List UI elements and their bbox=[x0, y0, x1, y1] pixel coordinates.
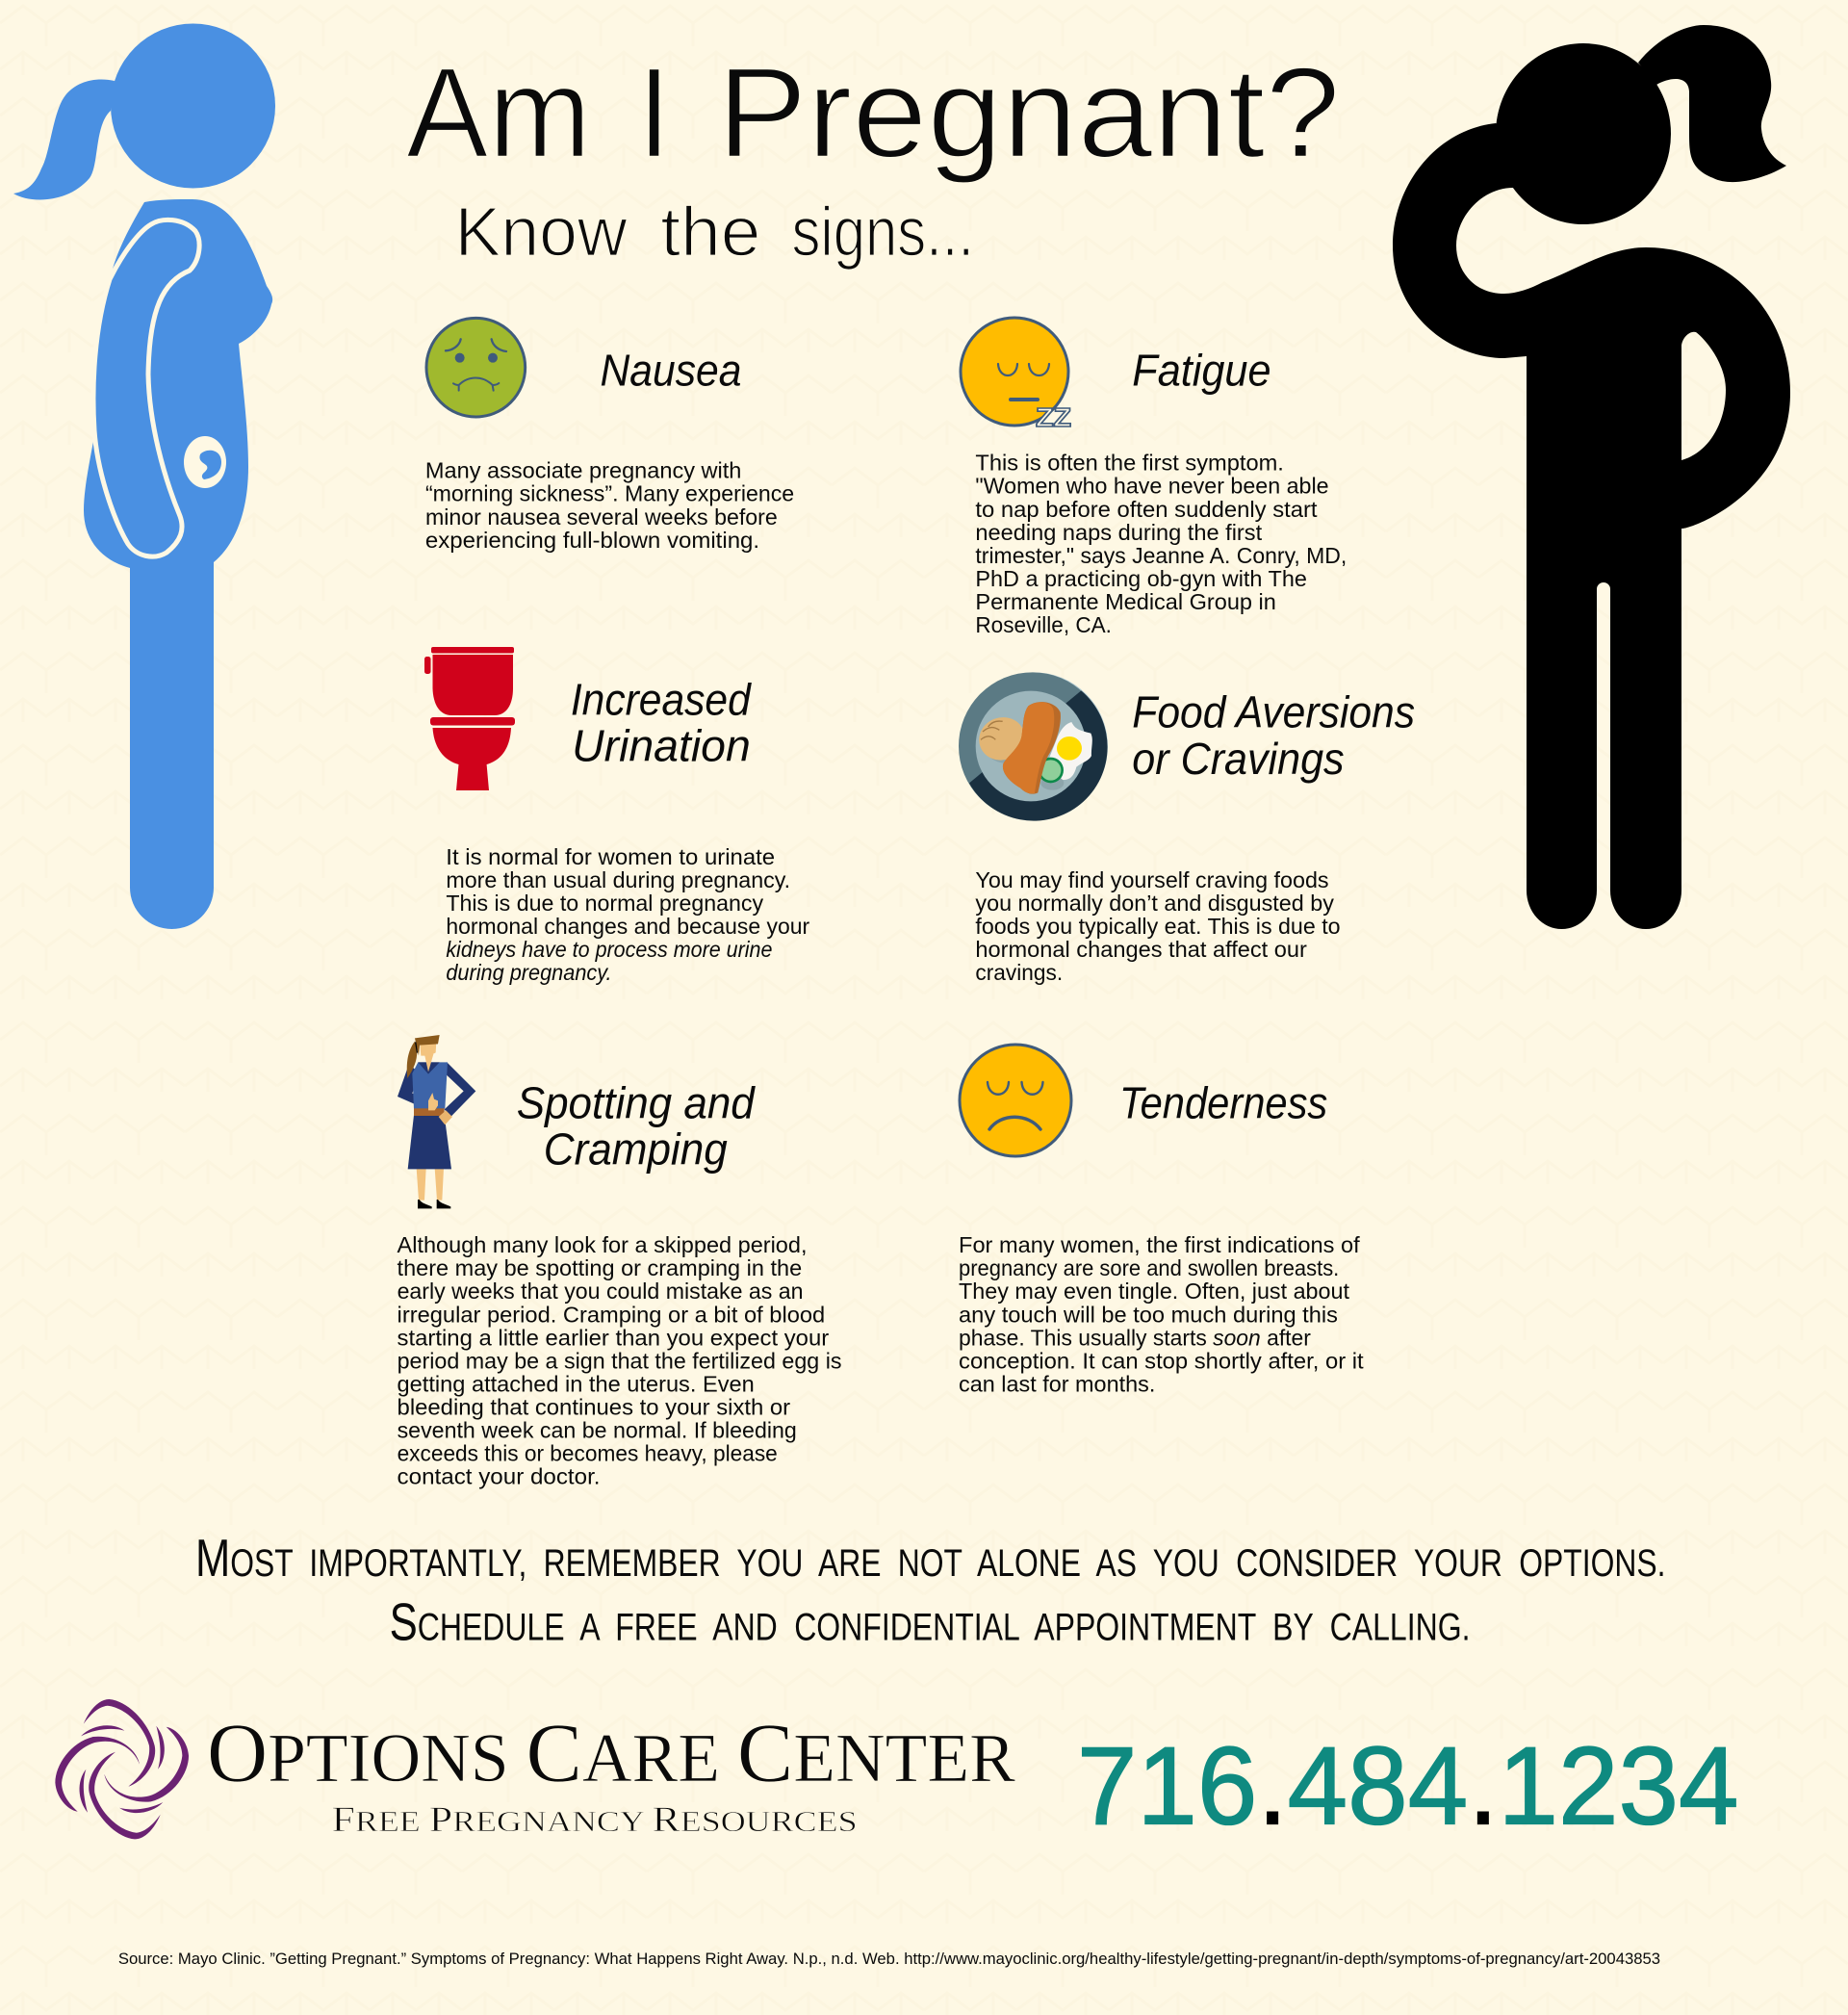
text: urination description: This is due to normal pregnancy bbox=[446, 891, 763, 916]
source citation: Source: Mayo Clinic. ”Getting Pregnant.” Symptoms of Pregnancy: What Happens Right Away. N.p., n.d. Web. http://www.mayoclinic.org/healthy-lifestyle/getting-pregnant/in-depth/symptoms-of-pregnancy/art-20043853 bbox=[118, 1950, 1660, 1968]
heading: spotting and cramping: Cramping bbox=[544, 1124, 728, 1175]
icon: toilet bbox=[424, 647, 515, 790]
panel: nausea bbox=[425, 318, 794, 553]
text: fatigue description: PhD a practicing ob-gyn with The bbox=[975, 566, 1307, 591]
text: spotting description: early weeks that you could mistake as an bbox=[398, 1279, 804, 1304]
title bbox=[406, 41, 1341, 185]
text: spotting description: getting attached in the uterus. Even bbox=[398, 1371, 755, 1396]
icon: standing woman bbox=[398, 1035, 475, 1208]
text: fatigue description: needing naps during the first bbox=[975, 520, 1263, 545]
text: fatigue description: This is often the first symptom. bbox=[975, 451, 1284, 476]
text: nausea description: “morning sickness”. Many experience bbox=[425, 481, 794, 506]
text: food description: cravings. bbox=[975, 960, 1063, 985]
callout: closing message: SCHEDULE A FREE AND CONFIDENTIAL APPOINTMENT BY CALLING. bbox=[390, 1592, 1470, 1652]
heading: nausea: Nausea bbox=[601, 346, 741, 396]
text: tenderness description: phase. This usually starts soon after bbox=[959, 1325, 1311, 1350]
text: tenderness description: pregnancy are sore and swollen breasts. bbox=[959, 1255, 1339, 1280]
heading: food aversions or cravings: or Cravings bbox=[1132, 734, 1345, 784]
logo text: options care center: OPTIONS CARE CENTER bbox=[207, 1706, 1015, 1800]
title: Pregnant? bbox=[717, 41, 1341, 185]
heading: increased urination: Urination bbox=[572, 720, 751, 770]
title: Am bbox=[406, 41, 591, 185]
text: spotting description: starting a little earlier than you expect your bbox=[398, 1325, 829, 1350]
text: tenderness description: conception. It can stop shortly after, or it bbox=[959, 1348, 1364, 1373]
heading: increased urination bbox=[571, 674, 753, 770]
text: spotting description bbox=[398, 1232, 842, 1488]
text: fatigue description: Permanente Medical Group in bbox=[975, 589, 1276, 614]
pregnant woman figure (blue) bbox=[13, 23, 275, 929]
panel: food aversions bbox=[959, 672, 1415, 985]
text: urination description: more than usual during pregnancy. bbox=[446, 867, 790, 892]
text: nausea description bbox=[425, 458, 794, 553]
heading: tenderness: Tenderness bbox=[1119, 1078, 1327, 1128]
phone number: 716.484.1234 bbox=[1077, 1725, 1739, 1848]
title: I bbox=[637, 41, 671, 185]
text: spotting description: Although many look for a skipped period, bbox=[398, 1232, 808, 1257]
text: tenderness description: any touch will be too much during this bbox=[959, 1302, 1338, 1327]
subtitle: the bbox=[660, 194, 760, 271]
text: spotting description: bleeding that continues to your sixth or bbox=[398, 1394, 790, 1419]
icon: nauseous face bbox=[426, 318, 526, 417]
panel: increased urination bbox=[424, 647, 809, 985]
text: urination description: during pregnancy. bbox=[446, 960, 612, 985]
text: urination description: kidneys have to process more urine bbox=[446, 937, 772, 962]
icon: options care center swirl logo bbox=[55, 1699, 189, 1839]
text: food description: hormonal changes that affect our bbox=[975, 937, 1307, 962]
subtitle: Know bbox=[455, 194, 629, 271]
text: fatigue description: to nap before often suddenly start bbox=[975, 497, 1318, 522]
text: nausea description: Many associate pregnancy with bbox=[425, 458, 741, 483]
panel: fatigue bbox=[961, 318, 1347, 637]
text: fatigue description: Roseville, CA. bbox=[975, 612, 1112, 637]
woman figure (black silhouette) bbox=[1393, 25, 1790, 929]
icon: sleepy face: ZZ bbox=[1036, 402, 1071, 432]
logo text: options care center: FREE PREGNANCY RESOURCES bbox=[331, 1800, 858, 1840]
panel: tenderness bbox=[959, 1045, 1364, 1396]
text: spotting description: seventh week can be normal. If bleeding bbox=[398, 1417, 797, 1442]
text: fatigue description: trimester," says Jeanne A. Conry, MD, bbox=[975, 543, 1347, 568]
text: urination description: It is normal for women to urinate bbox=[446, 844, 775, 869]
subtitle: signs... bbox=[791, 194, 974, 271]
text: spotting description: irregular period. Cramping or a bit of blood bbox=[398, 1302, 825, 1327]
text: fatigue description: "Women who have never been able bbox=[975, 474, 1329, 499]
text: food description: You may find yourself craving foods bbox=[975, 867, 1329, 892]
text: tenderness description bbox=[959, 1232, 1364, 1396]
heading: food aversions or cravings: Food Aversions bbox=[1132, 687, 1415, 737]
text: spotting description: there may be spotting or cramping in the bbox=[398, 1255, 802, 1280]
text: food description: you normally don’t and disgusted by bbox=[975, 891, 1334, 916]
text: urination description bbox=[446, 844, 809, 985]
text: spotting description: contact your doctor. bbox=[398, 1463, 601, 1488]
text: tenderness description: For many women, the first indications of bbox=[959, 1232, 1360, 1257]
heading: increased urination: Increased bbox=[571, 674, 753, 724]
text: nausea description: minor nausea several weeks before bbox=[425, 504, 778, 530]
text: food description bbox=[975, 867, 1341, 985]
heading: fatigue: Fatigue bbox=[1132, 346, 1271, 396]
text: urination description: hormonal changes and because your bbox=[446, 914, 809, 939]
icon: sleepy face bbox=[961, 318, 1071, 432]
panel: spotting and cramping bbox=[398, 1035, 842, 1488]
callout: closing message bbox=[195, 1528, 1665, 1652]
text: nausea description: experiencing full-blown vomiting. bbox=[425, 528, 759, 553]
heading: spotting and cramping: Spotting and bbox=[517, 1078, 757, 1128]
subtitle bbox=[455, 194, 974, 271]
text: spotting description: period may be a sign that the fertilized egg is bbox=[398, 1348, 842, 1373]
heading: spotting and cramping bbox=[517, 1078, 757, 1175]
icon: plate of food bbox=[959, 672, 1108, 821]
text: spotting description: exceeds this or becomes heavy, please bbox=[398, 1440, 778, 1465]
heading: food aversions or cravings bbox=[1132, 687, 1415, 784]
icon: sad face bbox=[960, 1045, 1071, 1156]
text: fatigue description bbox=[975, 451, 1347, 637]
text: tenderness description: They may even tingle. Often, just about bbox=[959, 1279, 1349, 1304]
text: tenderness description: can last for months. bbox=[959, 1371, 1155, 1396]
text: food description: foods you typically eat. This is due to bbox=[975, 914, 1341, 939]
